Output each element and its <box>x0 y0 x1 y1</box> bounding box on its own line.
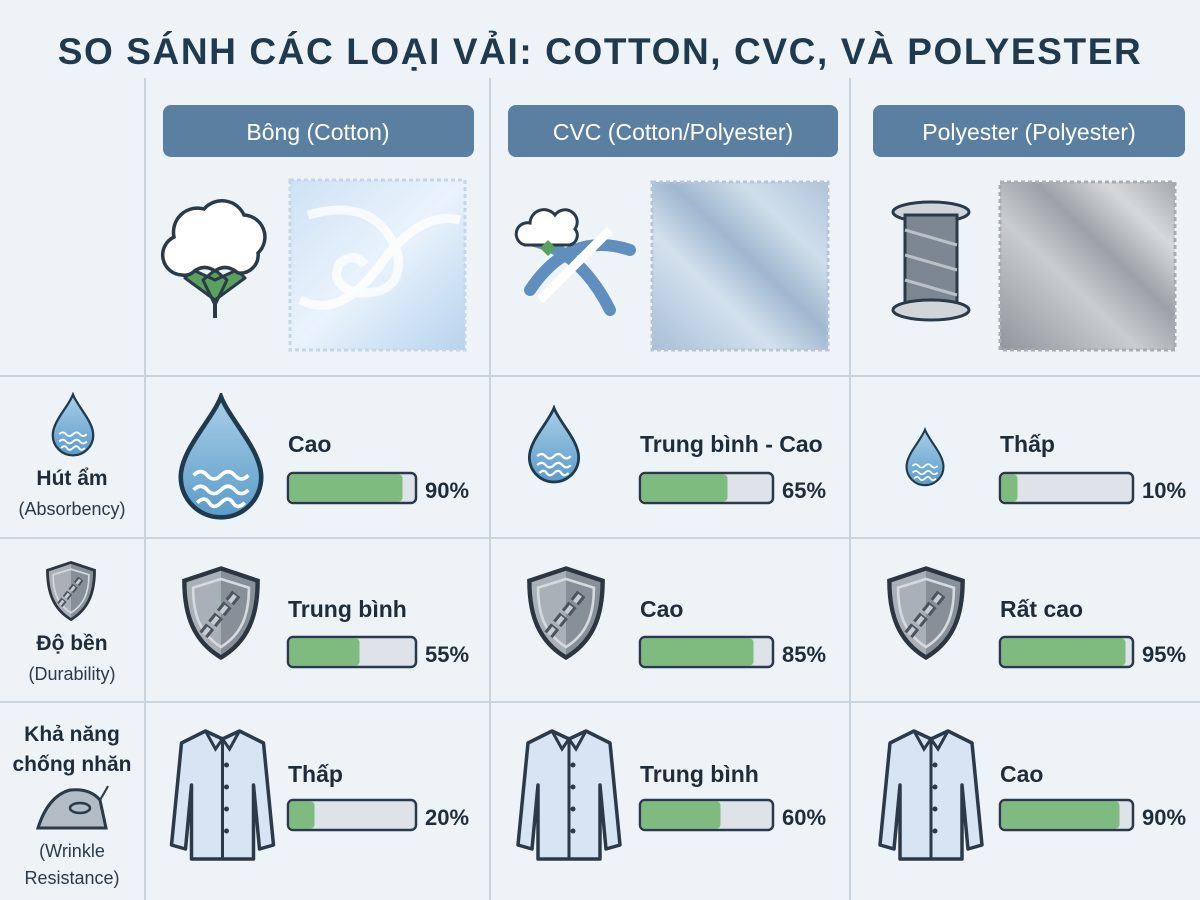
cell: polyester durability <box>889 568 1186 667</box>
cell: cvc durability: Cao <box>640 596 683 622</box>
title: SO SÁNH CÁC LOẠI VẢI: COTTON, CVC, VÀ POLYESTER <box>58 31 1142 72</box>
row label: wrinkle resistance: (Wrinkle <box>39 841 105 861</box>
cell: cvc durability <box>529 568 826 667</box>
cell: cotton durability: Trung bình <box>288 596 407 622</box>
header: polyester: Polyester (Polyester) <box>922 119 1136 145</box>
header: cotton <box>163 105 474 157</box>
cell: polyester durability: Rất cao <box>1000 596 1083 622</box>
cell: polyester durability: 95% <box>1142 642 1186 667</box>
cell: cvc wrinkle: 60% <box>782 805 826 830</box>
swatch: polyester fabric <box>1000 182 1175 350</box>
row label: durability: Độ bền <box>36 632 108 655</box>
cell: cotton absorbency: Cao <box>288 431 331 457</box>
icon: iron <box>38 786 108 828</box>
row label: wrinkle resistance: chống nhăn <box>12 753 132 776</box>
header: polyester <box>873 105 1185 157</box>
cell: cotton wrinkle: Thấp <box>288 761 343 787</box>
row label: durability: (Durability) <box>28 664 116 684</box>
swatch: cotton fabric <box>290 180 465 350</box>
cell: cotton wrinkle: 20% <box>425 805 469 830</box>
cell: cvc wrinkle: Trung bình <box>640 761 759 787</box>
icon: cvc weave <box>516 210 630 310</box>
row label: absorbency: (Absorbency) <box>18 499 126 519</box>
row label: absorbency: Hút ẩm <box>36 467 108 490</box>
cell: cvc wrinkle <box>518 731 826 859</box>
row label: absorbency <box>18 395 126 519</box>
cell: cotton durability: 55% <box>425 642 469 667</box>
cell: cotton wrinkle <box>172 731 469 859</box>
cell: polyester absorbency <box>907 430 1186 503</box>
header: cvc: CVC (Cotton/Polyester) <box>553 119 793 145</box>
cell: cotton absorbency <box>181 397 469 517</box>
cell: cotton absorbency: 90% <box>425 478 469 503</box>
cell: polyester wrinkle: Cao <box>1000 761 1043 787</box>
cell: cvc absorbency: Trung bình - Cao <box>640 431 823 457</box>
cell: polyester absorbency: 10% <box>1142 478 1186 503</box>
icon: spool <box>893 202 969 320</box>
cell: cotton durability <box>184 568 469 667</box>
row label: wrinkle resistance: Resistance) <box>24 868 120 888</box>
swatch: cvc fabric <box>652 182 828 350</box>
header: cotton: Bông (Cotton) <box>246 119 390 145</box>
cell: polyester wrinkle <box>880 731 1186 859</box>
cell: cvc absorbency <box>529 408 826 503</box>
cell: cvc durability: 85% <box>782 642 826 667</box>
icon: cotton boll <box>163 201 265 318</box>
cell: cvc absorbency: 65% <box>782 478 826 503</box>
row label: durability <box>28 562 116 684</box>
row label: wrinkle resistance: Khả năng <box>24 723 120 746</box>
cell: polyester absorbency: Thấp <box>1000 431 1055 457</box>
header: cvc <box>508 105 838 157</box>
row label: wrinkle resistance <box>12 723 132 888</box>
cell: polyester wrinkle: 90% <box>1142 805 1186 830</box>
